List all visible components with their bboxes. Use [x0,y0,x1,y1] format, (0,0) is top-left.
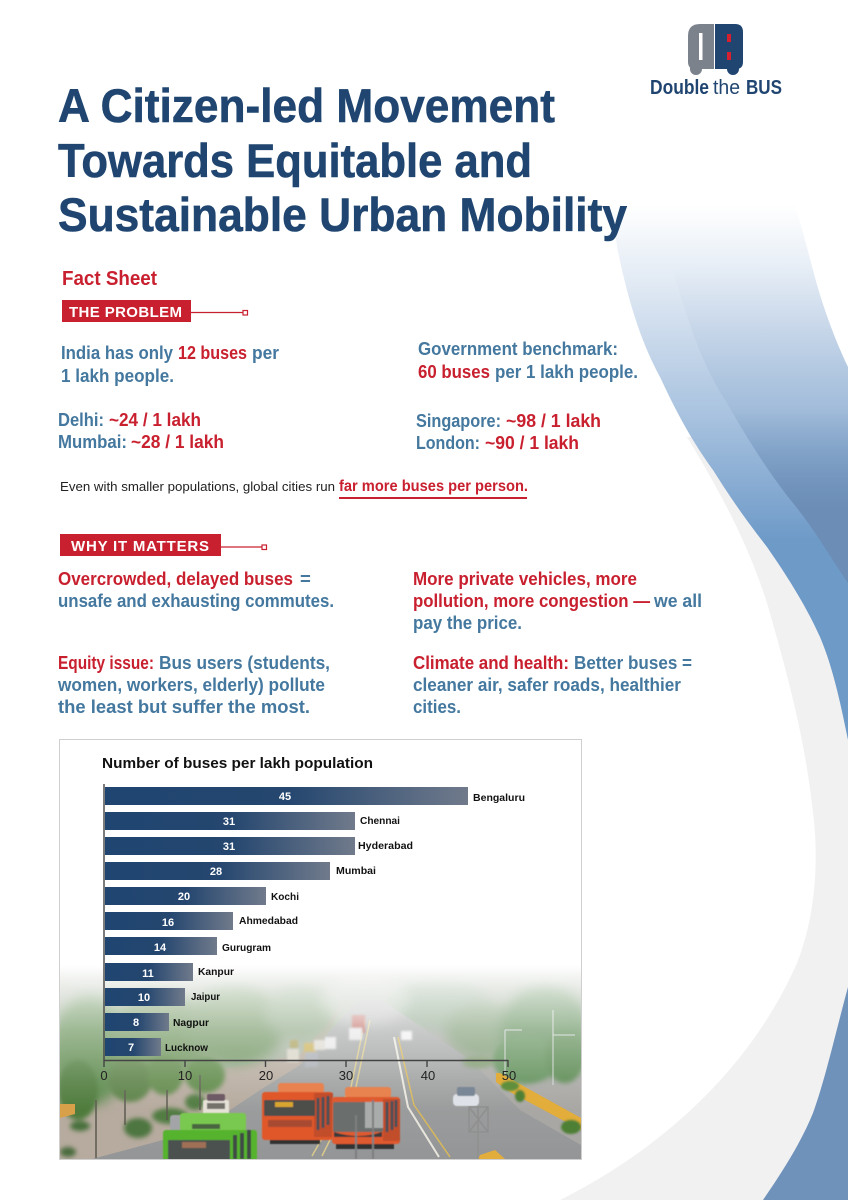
logo: Double the BUS [650,24,782,99]
bar: Nagpur 8: Nagpur [173,1017,209,1029]
text: climate and health: cleaner air, safer roads, healthier [413,674,681,695]
bar: Lucknow 7: 7 [128,1042,134,1054]
bar: Mumbai 28: Mumbai [336,865,376,877]
text: overcrowded buses: unsafe and exhausting commutes. [58,590,334,611]
bar: Chennai 31: Chennai [360,815,400,827]
text: private vehicles [413,568,702,633]
bar: Lucknow 7 [105,1038,209,1056]
text: climate and health: cities. [413,696,461,717]
bar: Bengaluru 45 [105,787,525,805]
callout: far more buses per person: far more buses per person. [339,478,528,495]
text: private vehicles: pollution, more congestion — [413,590,650,611]
bar: Jaipur 10: Jaipur [191,991,220,1003]
text: India has only 12 buses: 1 lakh people. [61,365,174,386]
text: Delhi and Mumbai figures [58,409,224,452]
callout: far more buses per person [60,478,528,499]
section tag: Why It Matters: WHY IT MATTERS [71,538,209,555]
bar: Nagpur 8 [105,1013,209,1031]
text: Singapore and London figures: ~98 / 1 lakh [506,410,601,431]
bar: Hyderabad 31 [105,837,413,855]
bar: Mumbai 28 [105,862,376,880]
logo wordmark: Double [650,77,709,99]
bar: Hyderabad 31: Hyderabad [358,840,413,852]
bar: Kochi 20: Kochi [271,891,299,903]
text: India has only 12 buses: India has only [61,342,174,363]
text: equity issue: Bus users (students, [159,652,330,673]
bar: Gurugram 14: Gurugram [222,942,271,954]
bar: Gurugram 14 [105,937,271,955]
chart axes: 40 [421,1068,435,1083]
title [58,80,628,242]
text: overcrowded buses: = [300,568,311,589]
logo wordmark: the [713,77,740,99]
chart axes: 10 [178,1068,192,1083]
photo: green bus [163,1113,257,1162]
text: climate and health: Better buses = [574,652,692,673]
text: Delhi and Mumbai figures: ~24 / 1 lakh [109,409,201,430]
photo: orange bus left [262,1083,333,1144]
bar: Hyderabad 31: 31 [223,841,235,853]
text: climate and health [413,652,692,717]
chart axes: 50 [502,1068,516,1083]
text: equity issue: the least but suffer the most. [58,696,310,717]
bar: Nagpur 8: 8 [133,1017,139,1029]
chart axes: 20 [259,1068,273,1083]
text: overcrowded buses: Overcrowded, delayed buses [58,568,293,589]
chart axes: 30 [339,1068,353,1083]
text: Delhi and Mumbai figures: ~28 / 1 lakh [131,431,224,452]
bar: Chennai 31: 31 [223,816,235,828]
bar: Mumbai 28: 28 [210,866,222,878]
title: Sustainable Urban Mobility [58,189,628,242]
bar: Bengaluru 45: 45 [279,791,291,803]
photo: buses on a hazy road [50,965,590,1162]
text: India has only 12 buses: 12 buses [178,342,247,363]
text: Government benchmark: 60 buses [418,361,490,382]
text: Government benchmark: per 1 lakh people. [495,361,638,382]
section tag: Why It Matters [60,534,266,556]
text: Delhi and Mumbai figures: Delhi: [58,409,104,430]
chart: Number of buses per lakh population [100,755,525,1083]
bar: Ahmedabad 16: 16 [162,917,174,929]
bar: Bengaluru 45: Bengaluru [473,792,525,804]
photo: silver car [453,1087,479,1106]
icon: split bus [688,24,743,75]
bar: Kanpur 11 [105,963,234,981]
photo: signpost [469,1107,488,1159]
logo wordmark [650,77,782,99]
bar: Jaipur 10: 10 [138,992,150,1004]
photo: orange bus right [332,1087,400,1159]
bar: Kochi 20: 20 [178,891,190,903]
text: equity issue: Equity issue: [58,652,154,673]
callout: far more buses per person: Even with smaller populations, global cities run [60,479,335,494]
text: private vehicles: pay the price. [413,612,522,633]
bar: Jaipur 10 [105,988,220,1006]
chart axes: 0 [100,1068,108,1083]
text: overcrowded buses [58,568,334,611]
text: private vehicles: we all [653,590,702,611]
text: Delhi and Mumbai figures: Mumbai: [58,431,127,452]
section tag: The Problem: THE PROBLEM [69,304,182,321]
bar: Kanpur 11: Kanpur [198,966,234,978]
bar: Ahmedabad 16: Ahmedabad [239,915,298,927]
bar: Gurugram 14: 14 [154,942,167,954]
text: private vehicles: More private vehicles, more [413,568,637,589]
chart title: Number of buses per lakh population [102,755,373,772]
text: Singapore and London figures: Singapore: [416,410,501,431]
text: India has only 12 buses: per [252,342,279,363]
chart axes [100,784,516,1083]
title: A Citizen-led Movement [58,80,555,133]
panel: bus chart with road photo [50,740,590,1162]
bar: Kanpur 11: 11 [142,968,154,980]
background swoosh shapes [560,192,848,1200]
photo: cars behind buses [170,1094,229,1133]
title: Towards Equitable and [58,135,532,188]
text: equity issue [57,652,330,717]
text: Singapore and London figures: ~90 / 1 lakh [485,432,579,453]
logo wordmark: BUS [746,77,782,99]
text: Singapore and London figures: London: [416,432,480,453]
bar: Kochi 20 [105,887,299,905]
text: Singapore and London figures [416,410,601,453]
text: India has only 12 buses [61,342,279,386]
bar: Lucknow 7: Lucknow [165,1042,209,1054]
text: climate and health: Climate and health: [413,652,569,673]
bar: Ahmedabad 16 [105,912,298,930]
text: Government benchmark [418,338,638,382]
text: Government benchmark: Government benchmark: [418,338,618,359]
text: equity issue: women, workers, elderly) pollute [57,674,325,695]
section tag: The Problem [62,300,248,322]
bar: Chennai 31 [105,812,400,830]
heading: Fact Sheet: Fact Sheet [62,267,157,290]
